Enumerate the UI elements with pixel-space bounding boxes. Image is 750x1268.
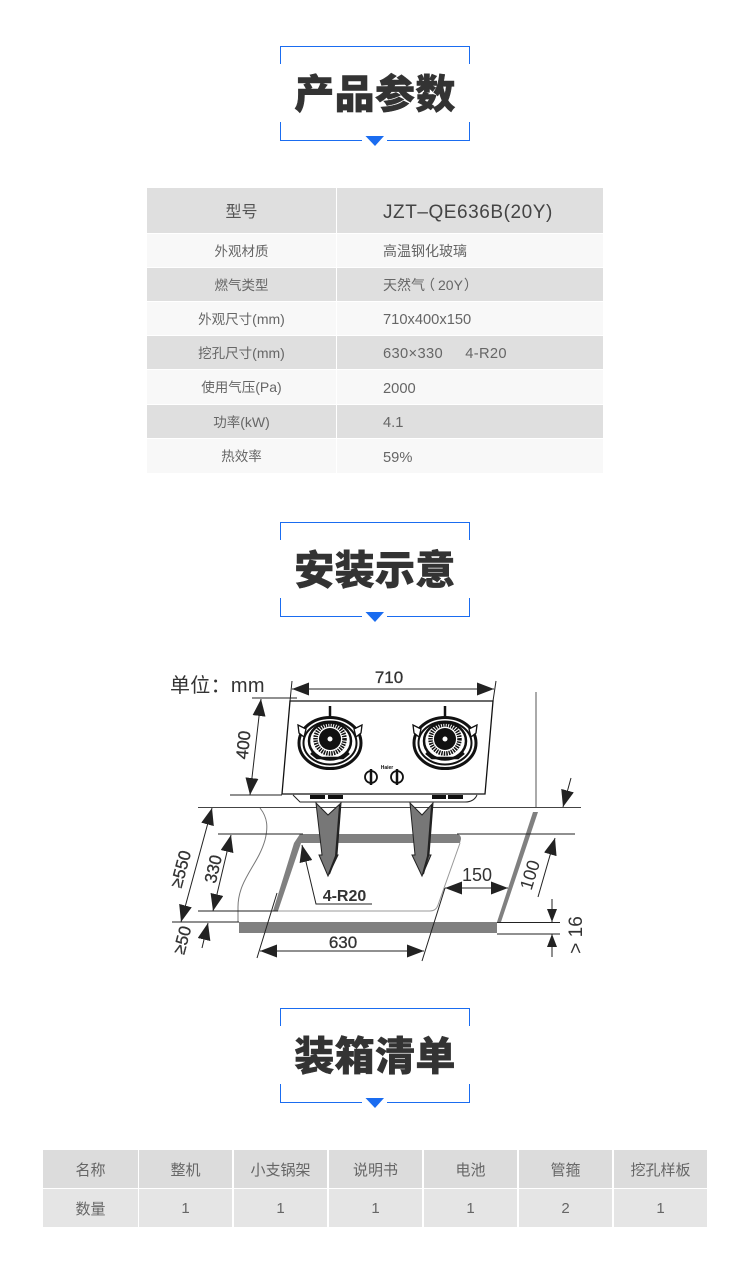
table row: efficiency bbox=[221, 449, 412, 466]
cell: name header: 名称 bbox=[75, 1162, 106, 1178]
table row: pressure: 使用气压(Pa) bbox=[201, 379, 282, 395]
cell: main unit: 整机 bbox=[170, 1162, 200, 1178]
table row: pressure bbox=[201, 379, 416, 396]
cell: hose clamp: 管箍 bbox=[550, 1162, 580, 1178]
cell: cutout template: 挖孔样板 bbox=[630, 1162, 690, 1178]
dimension labels: 630 bbox=[329, 933, 357, 952]
table row: pressure: 2000 bbox=[383, 380, 416, 396]
table row: material: 高温钢化玻璃 bbox=[383, 242, 467, 258]
icon: control knobs and logo bbox=[365, 765, 403, 785]
table row: power: 4.1 bbox=[383, 415, 403, 431]
cell: cutout template bbox=[614, 1150, 707, 1188]
heading: 装箱清单 bbox=[280, 1008, 470, 1108]
cell: cutout template quantity: 1 bbox=[656, 1200, 665, 1216]
dimension labels: 100 bbox=[516, 858, 544, 892]
table row: model bbox=[147, 188, 603, 233]
heading: 产品参数: 产品参数 bbox=[294, 73, 456, 117]
cell: battery quantity: 1 bbox=[466, 1200, 475, 1216]
table row: cutout size: 挖孔尺寸(mm) bbox=[198, 344, 285, 360]
dimension labels: 710 bbox=[375, 668, 403, 687]
cell: main unit quantity bbox=[139, 1189, 232, 1227]
cell: battery quantity bbox=[424, 1189, 517, 1227]
panel: specification table bbox=[147, 188, 603, 466]
table row: outer size: 外观尺寸(mm) bbox=[198, 310, 285, 326]
cell: quantity header bbox=[43, 1189, 138, 1227]
dimension labels bbox=[167, 668, 587, 956]
table row: power: 功率(kW) bbox=[213, 414, 270, 430]
cell: main unit quantity: 1 bbox=[181, 1200, 190, 1216]
table row: model: JZT–QE636B(20Y) bbox=[383, 202, 553, 222]
table row: cutout size: 630×330 4-R20 bbox=[383, 346, 507, 362]
cell: small rack quantity bbox=[234, 1189, 327, 1227]
icon: control knobs and logo: Haier bbox=[381, 765, 393, 771]
dimension labels: 330 bbox=[201, 853, 226, 885]
heading: 安装示意 bbox=[280, 522, 470, 622]
table row: power bbox=[147, 405, 603, 438]
icon: right burner bbox=[413, 706, 477, 768]
cell: manual quantity bbox=[329, 1189, 422, 1227]
cell: manual quantity: 1 bbox=[371, 1200, 380, 1216]
chart: installation diagram bbox=[167, 668, 587, 962]
cell: hose clamp quantity bbox=[519, 1189, 612, 1227]
heading: 安装示意: 安装示意 bbox=[294, 549, 456, 593]
cell: battery: 电池 bbox=[455, 1162, 486, 1178]
extension lines bbox=[172, 681, 581, 961]
table row: gas type: 燃气类型 bbox=[214, 278, 268, 292]
cell: manual bbox=[329, 1150, 422, 1188]
cell: battery bbox=[424, 1150, 517, 1188]
cabinet outline and countertop bbox=[238, 692, 538, 933]
icon: left burner bbox=[298, 706, 362, 768]
cell: cutout template quantity bbox=[614, 1189, 707, 1227]
table row: outer size: 710x400x150 bbox=[383, 312, 471, 328]
dimension labels: 400 bbox=[233, 730, 254, 760]
dimension labels: 150 bbox=[462, 865, 492, 885]
heading: 产品参数 bbox=[280, 46, 470, 146]
cell: hose clamp quantity: 2 bbox=[561, 1200, 570, 1216]
cell: name header bbox=[43, 1150, 138, 1188]
table row: material: 外观材质 bbox=[214, 244, 268, 258]
dimension labels: ≥50 bbox=[170, 924, 195, 956]
cell: small rack: 小支锅架 bbox=[250, 1162, 310, 1178]
cell: hose clamp bbox=[519, 1150, 612, 1188]
dimension labels: ≥550 bbox=[167, 848, 195, 890]
table row: gas type bbox=[147, 268, 603, 301]
unit label: 单位：mm bbox=[170, 674, 265, 697]
table row: cutout size bbox=[147, 336, 603, 369]
stove body bbox=[282, 701, 493, 802]
table row: material bbox=[214, 242, 467, 258]
cell: small rack quantity: 1 bbox=[276, 1200, 285, 1216]
icon: left gas arrow bbox=[316, 803, 341, 876]
table row: model: 型号 bbox=[225, 204, 258, 220]
dimension labels: > 16 bbox=[566, 916, 587, 954]
table row: gas type: 天然气（20Y） bbox=[383, 276, 478, 292]
icon: right gas arrow bbox=[410, 803, 433, 876]
table row: efficiency: 热效率 bbox=[221, 449, 262, 464]
heading: 装箱清单: 装箱清单 bbox=[294, 1035, 456, 1079]
cell: main unit bbox=[139, 1150, 232, 1188]
dimension arrows bbox=[181, 689, 571, 957]
cell: quantity header: 数量 bbox=[75, 1200, 106, 1218]
dimension labels: 4-R20 bbox=[323, 888, 366, 905]
table row: outer size bbox=[198, 310, 471, 328]
cell: small rack bbox=[234, 1150, 327, 1188]
table row: efficiency: 59% bbox=[383, 450, 412, 466]
cell: manual: 说明书 bbox=[353, 1162, 398, 1178]
